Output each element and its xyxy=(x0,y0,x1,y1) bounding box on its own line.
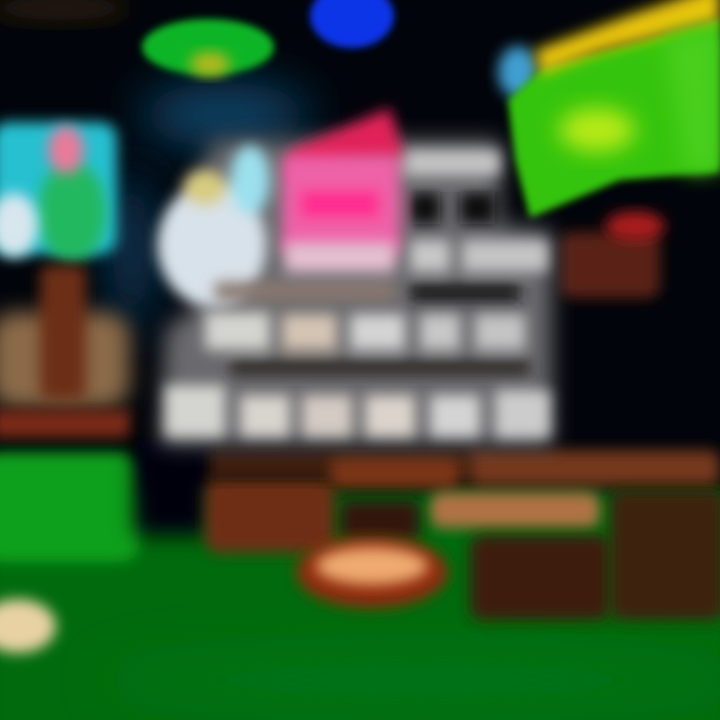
tree: right trunk xyxy=(560,211,665,298)
tree: left pastel tree xyxy=(0,122,117,262)
logs: brown wood pile xyxy=(205,450,720,620)
heading line 4 xyxy=(165,385,550,438)
ground: green lawn xyxy=(0,452,720,720)
dark shadow under heading xyxy=(135,440,210,535)
ground: left tan mound xyxy=(0,265,130,438)
heading line 3 xyxy=(205,312,530,376)
heading underlay xyxy=(160,140,552,445)
icon: green floating canopy xyxy=(142,19,274,76)
icon: stone on lawn xyxy=(0,599,56,653)
heading line 1 xyxy=(158,145,500,307)
heading line 2 xyxy=(215,240,548,302)
heading: blurred title block xyxy=(158,108,552,445)
icon: blue blob xyxy=(310,0,394,48)
tree: top right canopy xyxy=(498,0,720,218)
heading accent: red top xyxy=(290,108,405,175)
